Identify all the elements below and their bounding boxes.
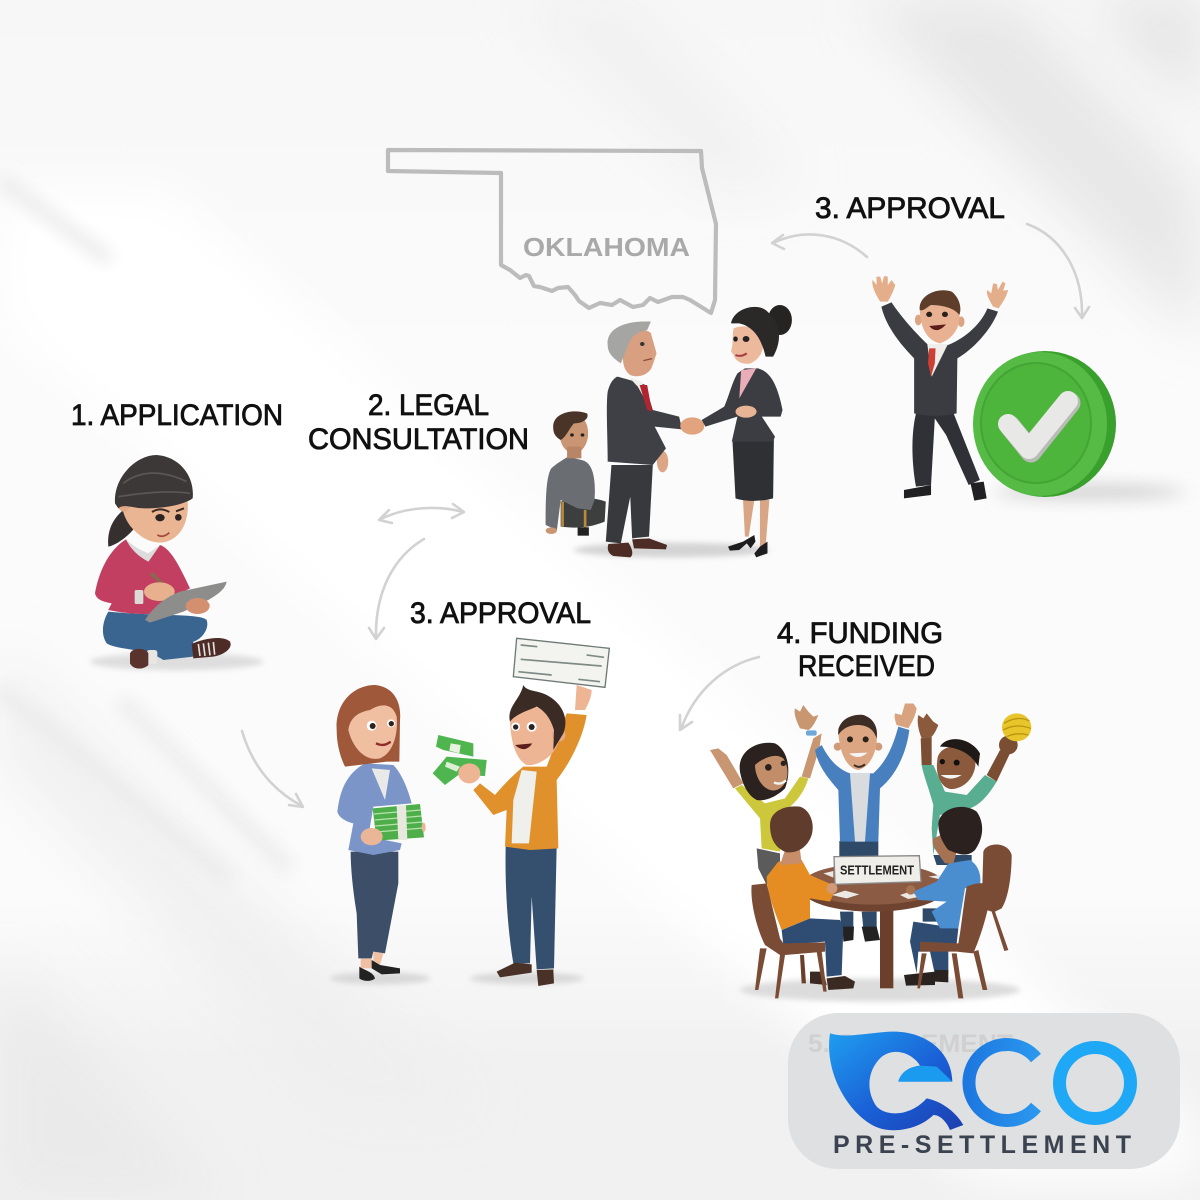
label: step 3 approval top: 3. APPROVAL (815, 192, 1005, 225)
logo: Eco Pre-Settlement (788, 1013, 1180, 1169)
arrow: top approval downward (1027, 224, 1089, 318)
logo panel (788, 1013, 1180, 1169)
label: step 1 application: 1. APPLICATION (71, 399, 283, 432)
figure: man celebrating (872, 276, 1008, 501)
check (513, 638, 609, 687)
figure: celebrating group at table (710, 703, 1031, 1002)
figure: man with check and cash (433, 638, 609, 986)
label: step 3 approval middle: 3. APPROVAL (410, 597, 591, 630)
state label: OKLAHOMA (523, 232, 690, 262)
arrow: consultation to approval (369, 539, 424, 639)
figure: woman with tablet (90, 455, 263, 670)
man center (795, 703, 917, 942)
label: step 2 legal consultation: 2. LEGAL (368, 389, 489, 422)
logo wordmark: PRE-SETTLEMENT (833, 1131, 1131, 1159)
label: step 4 funding received (777, 617, 943, 683)
front person right (904, 807, 982, 986)
chair left (751, 883, 827, 998)
arrow: funding received (680, 657, 759, 730)
chair right (917, 883, 992, 998)
bananas (1002, 713, 1031, 741)
cash bills (433, 735, 487, 785)
state outline: Oklahoma (388, 150, 716, 313)
arrow: top approval to Oklahoma (772, 235, 867, 257)
logo leaf e (829, 1032, 963, 1130)
table (803, 863, 944, 988)
faint label behind logo: 5. SETTLEMENT (808, 1030, 1013, 1058)
man right (918, 713, 1031, 922)
label: step 2 legal consultation (308, 389, 529, 456)
figure: lawyer woman handshake (702, 305, 792, 557)
arrow: application to approval (242, 731, 303, 807)
figure: lawyer man handshake (574, 321, 769, 557)
settlement sign: SETTLEMENT (840, 862, 914, 877)
icon: green check badge (973, 351, 1185, 499)
logo c (969, 1044, 1036, 1120)
woman left (710, 733, 822, 885)
logo o (1060, 1048, 1130, 1118)
arrow: double-headed consultation (379, 504, 464, 523)
front person left (767, 806, 855, 990)
chair back right (982, 845, 1012, 951)
label: step 4 funding received: 4. FUNDING (777, 617, 943, 650)
settlement sign (834, 856, 921, 884)
label: step 2 legal consultation: CONSULTATION (308, 423, 529, 456)
figure: woman with cash (330, 685, 430, 984)
label: step 4 funding received: RECEIVED (798, 650, 935, 683)
figure: seated boy (546, 411, 606, 536)
